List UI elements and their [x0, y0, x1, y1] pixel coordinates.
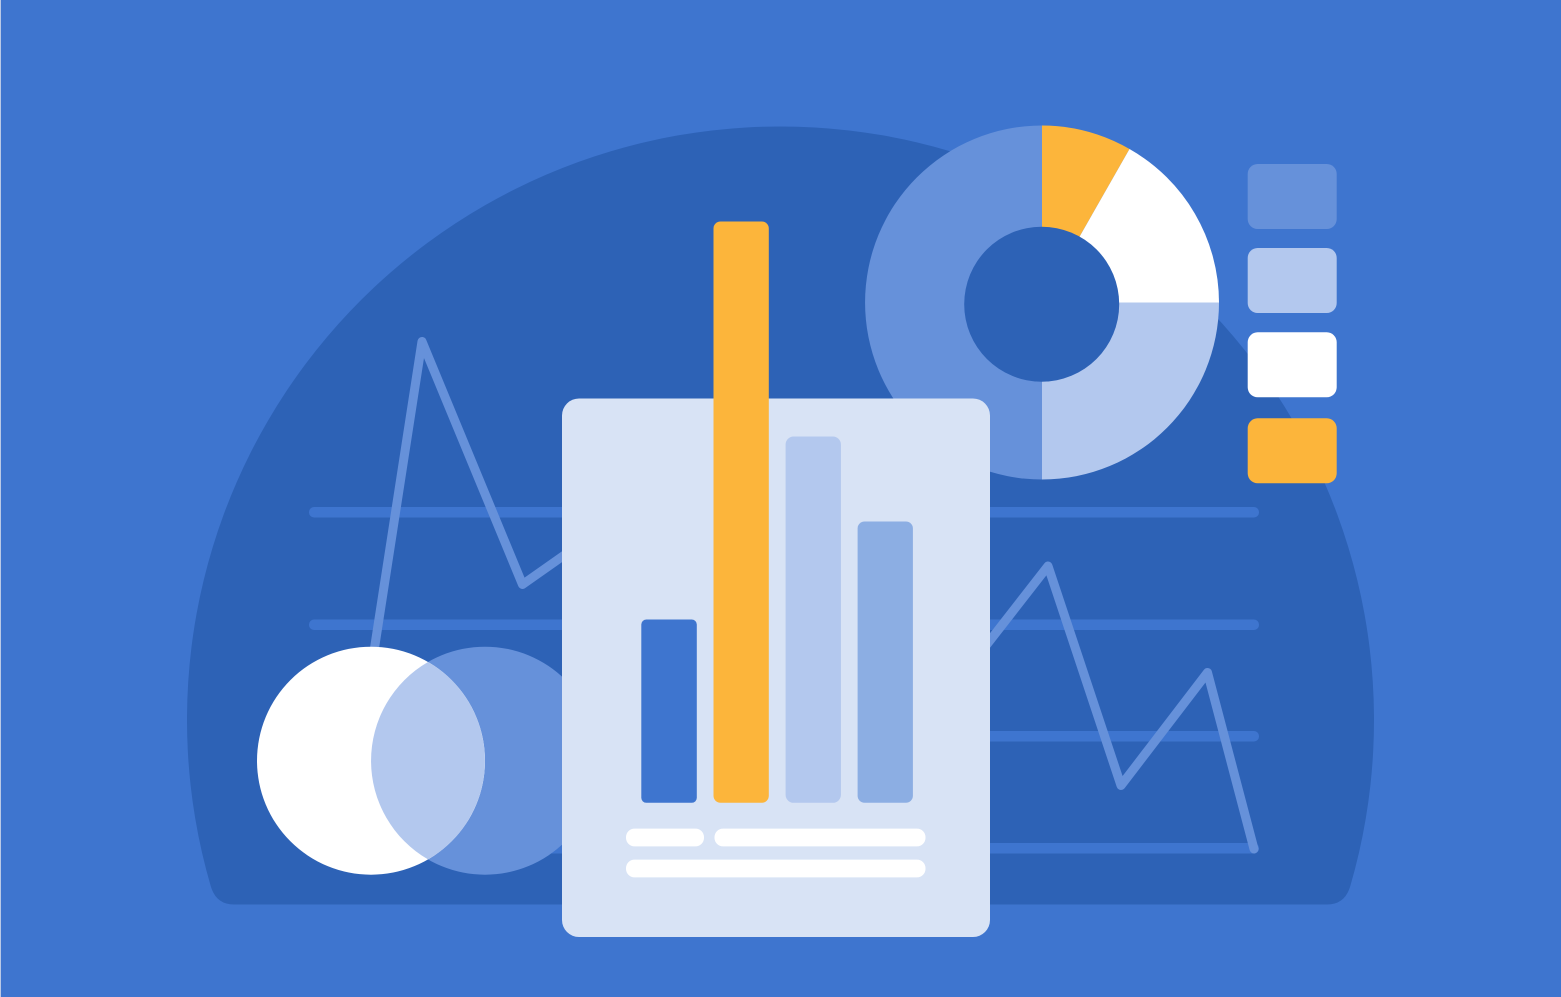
report card: [562, 222, 990, 937]
dark semicircle backdrop: [187, 126, 1374, 904]
bar: blue: [641, 620, 697, 803]
donut chart: [865, 126, 1219, 480]
bar: light blue: [786, 436, 841, 803]
line chart: [368, 342, 1254, 849]
bar: mid blue: [858, 522, 913, 803]
venn diagram: [257, 647, 599, 875]
grid lines: [309, 507, 1259, 854]
legend swatches: [1248, 164, 1337, 483]
bar: orange: [714, 222, 769, 803]
text placeholder lines: [626, 829, 926, 877]
